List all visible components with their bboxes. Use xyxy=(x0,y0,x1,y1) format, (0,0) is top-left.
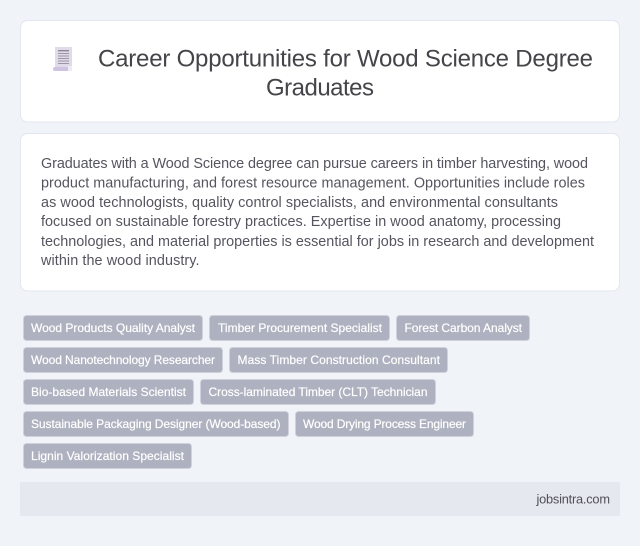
text block: description: as wood technologists, quality control specialists, and environmental consultants xyxy=(41,195,558,211)
text block: description: technologies, and material properties is essential for jobs in research and development xyxy=(41,234,594,250)
title: Career Opportunities for Wood Science Degree xyxy=(98,46,593,72)
tag: Timber Procurement Specialist xyxy=(218,321,383,335)
tag: Lignin Valorization Specialist xyxy=(31,449,185,463)
tag xyxy=(24,348,222,372)
tag: Forest Carbon Analyst xyxy=(404,321,523,335)
text block: description xyxy=(40,156,594,269)
tag: Cross-laminated Timber (CLT) Technician xyxy=(208,385,428,399)
title: Graduates xyxy=(266,74,374,102)
text block: description: focused on sustainable forestry practices. Expertise in wood anatomy, processing xyxy=(41,214,561,230)
tag xyxy=(230,348,448,372)
icon: paper scroll xyxy=(53,47,72,71)
footer: jobsintra.com xyxy=(536,492,610,506)
text block: description: Graduates with a Wood Science degree can pursue careers in timber harvesting, wood xyxy=(41,156,588,172)
text block: description: within the wood industry. xyxy=(40,253,200,269)
tag xyxy=(24,412,288,436)
tag: Wood Products Quality Analyst xyxy=(31,321,196,335)
panel: description xyxy=(20,134,620,291)
tag: Bio-based Materials Scientist xyxy=(31,385,187,399)
tag xyxy=(296,412,474,436)
panel: header xyxy=(20,20,620,122)
tag xyxy=(210,316,390,340)
text block: description: product manufacturing, and forest resource management. Opportunities include roles xyxy=(41,175,585,191)
title xyxy=(98,46,593,102)
tag: Mass Timber Construction Consultant xyxy=(238,353,441,367)
tag xyxy=(24,444,192,468)
footer xyxy=(20,482,620,516)
tag: Sustainable Packaging Designer (Wood-based) xyxy=(31,417,280,431)
tag xyxy=(396,316,530,340)
tag: Wood Nanotechnology Researcher xyxy=(31,353,215,367)
tag xyxy=(24,316,202,340)
tag xyxy=(24,380,194,404)
tag: Wood Drying Process Engineer xyxy=(303,417,466,431)
tag list: career roles xyxy=(24,316,530,468)
tag xyxy=(200,380,436,404)
